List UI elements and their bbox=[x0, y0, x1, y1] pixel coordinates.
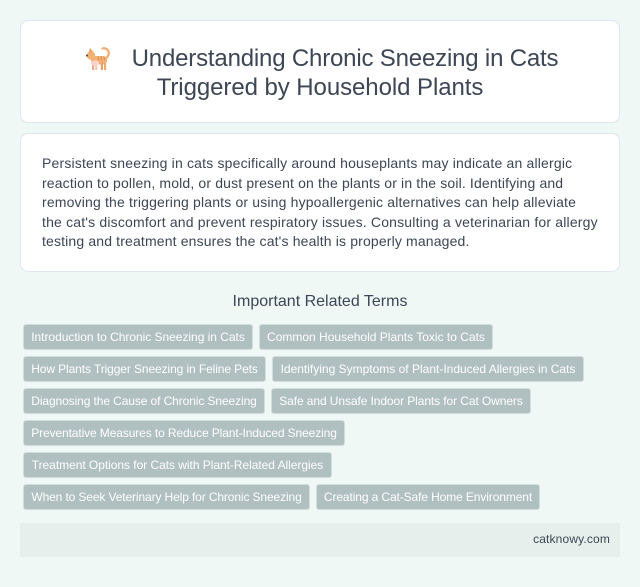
tag bbox=[23, 484, 310, 510]
tag bbox=[271, 388, 531, 414]
heading: related terms: Important Related Terms bbox=[233, 293, 407, 310]
panel: related term tags bbox=[23, 324, 584, 510]
tag: Safe and Unsafe Indoor Plants for Cat Owners bbox=[279, 394, 523, 408]
tag bbox=[259, 324, 493, 350]
description text: Persistent sneezing in cats specifically around houseplants may indicate an allergic bbox=[42, 155, 572, 171]
title bbox=[132, 45, 558, 101]
tag: When to Seek Veterinary Help for Chronic Sneezing bbox=[31, 490, 302, 504]
icon: cat bbox=[86, 47, 110, 70]
tag bbox=[272, 356, 584, 382]
tag bbox=[23, 420, 345, 446]
tag: Introduction to Chronic Sneezing in Cats bbox=[31, 330, 245, 344]
description text: testing and treatment ensures the cat's health is properly managed. bbox=[42, 233, 470, 249]
description text bbox=[42, 155, 598, 249]
title: Understanding Chronic Sneezing in Cats bbox=[132, 45, 558, 72]
tag: Identifying Symptoms of Plant-Induced Allergies in Cats bbox=[281, 362, 575, 376]
tag bbox=[23, 452, 332, 478]
tag: Treatment Options for Cats with Plant-Related Allergies bbox=[32, 458, 323, 472]
tag bbox=[23, 388, 265, 414]
tag: How Plants Trigger Sneezing in Feline Pets bbox=[31, 362, 258, 376]
description text: removing the triggering plants or using hypoallergenic alternatives can help alleviate bbox=[42, 194, 576, 210]
tag bbox=[316, 484, 540, 510]
tag: Diagnosing the Cause of Chronic Sneezing bbox=[31, 394, 257, 408]
tag bbox=[23, 324, 253, 350]
tag: Preventative Measures to Reduce Plant-Induced Sneezing bbox=[31, 426, 337, 440]
title: Triggered by Household Plants bbox=[157, 74, 483, 101]
footer source text: catknowy.com bbox=[533, 532, 610, 546]
tag bbox=[23, 356, 266, 382]
description text: reaction to pollen, mold, or dust present on the plants or in the soil. Identifying and bbox=[42, 175, 563, 191]
footer bar bbox=[20, 523, 620, 557]
tag: Creating a Cat-Safe Home Environment bbox=[324, 490, 532, 504]
description text: the cat's discomfort and prevent respiratory issues. Consulting a veterinarian for allergy bbox=[42, 214, 598, 230]
tag: Common Household Plants Toxic to Cats bbox=[267, 330, 485, 344]
panel: description card bbox=[20, 133, 620, 272]
panel: title card bbox=[20, 20, 620, 123]
